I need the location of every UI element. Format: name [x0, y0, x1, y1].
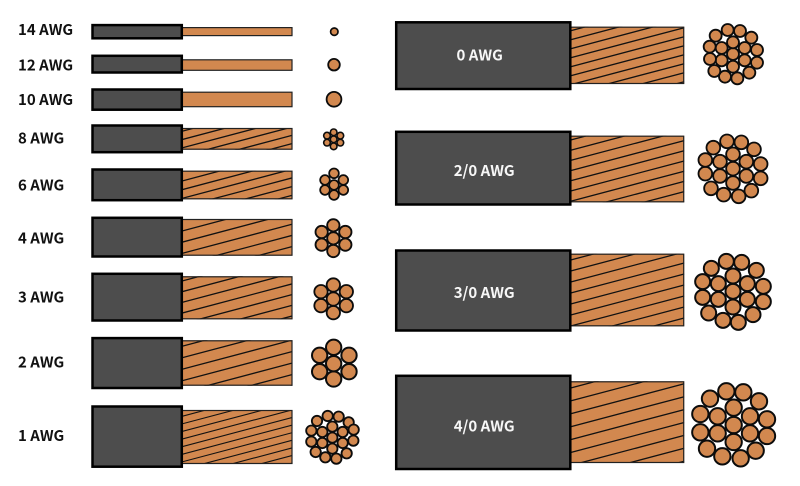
- wire: 14 AWG: [18, 19, 338, 40]
- jacket: 2 AWG: [92, 338, 182, 388]
- wire: 3 AWG: [18, 272, 354, 322]
- conductor: 4/0 AWG stranded: [572, 381, 684, 464]
- wire: 4/0 AWG: [394, 374, 776, 470]
- cross section: 4 AWG: [315, 219, 351, 257]
- label: 2 AWG: 2 AWG: [18, 352, 64, 373]
- label: 1 AWG: 1 AWG: [18, 425, 64, 446]
- cross section: 6 AWG: [320, 168, 348, 200]
- jacket: 3 AWG: [92, 274, 182, 320]
- jacket: 8 AWG: [92, 126, 182, 152]
- conductor: 14 AWG solid: [182, 28, 292, 36]
- cross section: 4/0 AWG: [692, 383, 775, 466]
- label: 3/0 AWG: 3/0 AWG: [454, 282, 515, 303]
- wire: 0 AWG: [394, 21, 764, 90]
- jacket: 0 AWG: [396, 22, 570, 89]
- jacket: 12 AWG: [92, 56, 182, 72]
- conductor: 10 AWG solid: [182, 92, 292, 107]
- wire: 4 AWG: [18, 216, 352, 258]
- cross section: 0 AWG: [704, 24, 763, 84]
- wire: 1 AWG: [19, 405, 360, 468]
- conductor: 0 AWG stranded: [572, 26, 684, 84]
- cross section: 2 AWG: [312, 340, 357, 387]
- label: 14 AWG: 14 AWG: [18, 19, 73, 40]
- conductor: 6 AWG stranded: [183, 170, 293, 200]
- wire: 6 AWG: [18, 168, 349, 202]
- conductor: 3/0 AWG stranded: [572, 254, 684, 326]
- cross section: 8 AWG: [324, 129, 344, 150]
- cross section: 2/0 AWG: [698, 134, 767, 203]
- jacket: 10 AWG: [92, 90, 182, 110]
- cross section: 1 AWG: [306, 411, 359, 464]
- jacket: 14 AWG: [92, 25, 182, 38]
- label: 4 AWG: 4 AWG: [18, 227, 64, 248]
- jacket: 4 AWG: [92, 218, 182, 256]
- label: 12 AWG: 12 AWG: [18, 55, 73, 76]
- label: 10 AWG: 10 AWG: [18, 89, 73, 110]
- jacket: 1 AWG: [92, 406, 182, 467]
- label: 6 AWG: 6 AWG: [18, 174, 64, 195]
- label: 3 AWG: 3 AWG: [18, 287, 64, 308]
- jacket: 2/0 AWG: [396, 132, 570, 204]
- jacket: 3/0 AWG: [396, 250, 570, 330]
- label: 0 AWG: 0 AWG: [457, 45, 503, 66]
- wire: 2/0 AWG: [394, 130, 768, 206]
- wire: 10 AWG: [18, 89, 341, 110]
- label: 2/0 AWG: 2/0 AWG: [454, 160, 515, 181]
- label: 4/0 AWG: 4/0 AWG: [454, 416, 515, 437]
- conductor: 2/0 AWG stranded: [572, 136, 684, 202]
- wire: 8 AWG: [18, 124, 344, 154]
- jacket: 4/0 AWG: [396, 376, 570, 469]
- cross section: 3 AWG: [314, 278, 353, 319]
- jacket: 6 AWG: [92, 170, 182, 200]
- label: 8 AWG: 8 AWG: [18, 127, 64, 148]
- wire: 2 AWG: [18, 336, 358, 390]
- conductor: 12 AWG solid: [182, 60, 292, 70]
- conductor: 2 AWG stranded: [183, 340, 293, 386]
- conductor: 3 AWG stranded: [183, 276, 293, 320]
- cross section: 14 AWG: [331, 28, 338, 35]
- wire: 12 AWG: [18, 55, 340, 76]
- conductor: 4 AWG stranded: [183, 218, 293, 256]
- cross section: 3/0 AWG: [695, 254, 771, 330]
- cross section: 10 AWG: [327, 92, 341, 107]
- wire: 3/0 AWG: [394, 249, 772, 332]
- conductor: 1 AWG stranded: [183, 410, 293, 464]
- cross section: 12 AWG: [328, 59, 340, 70]
- conductor: 8 AWG stranded: [183, 128, 293, 150]
